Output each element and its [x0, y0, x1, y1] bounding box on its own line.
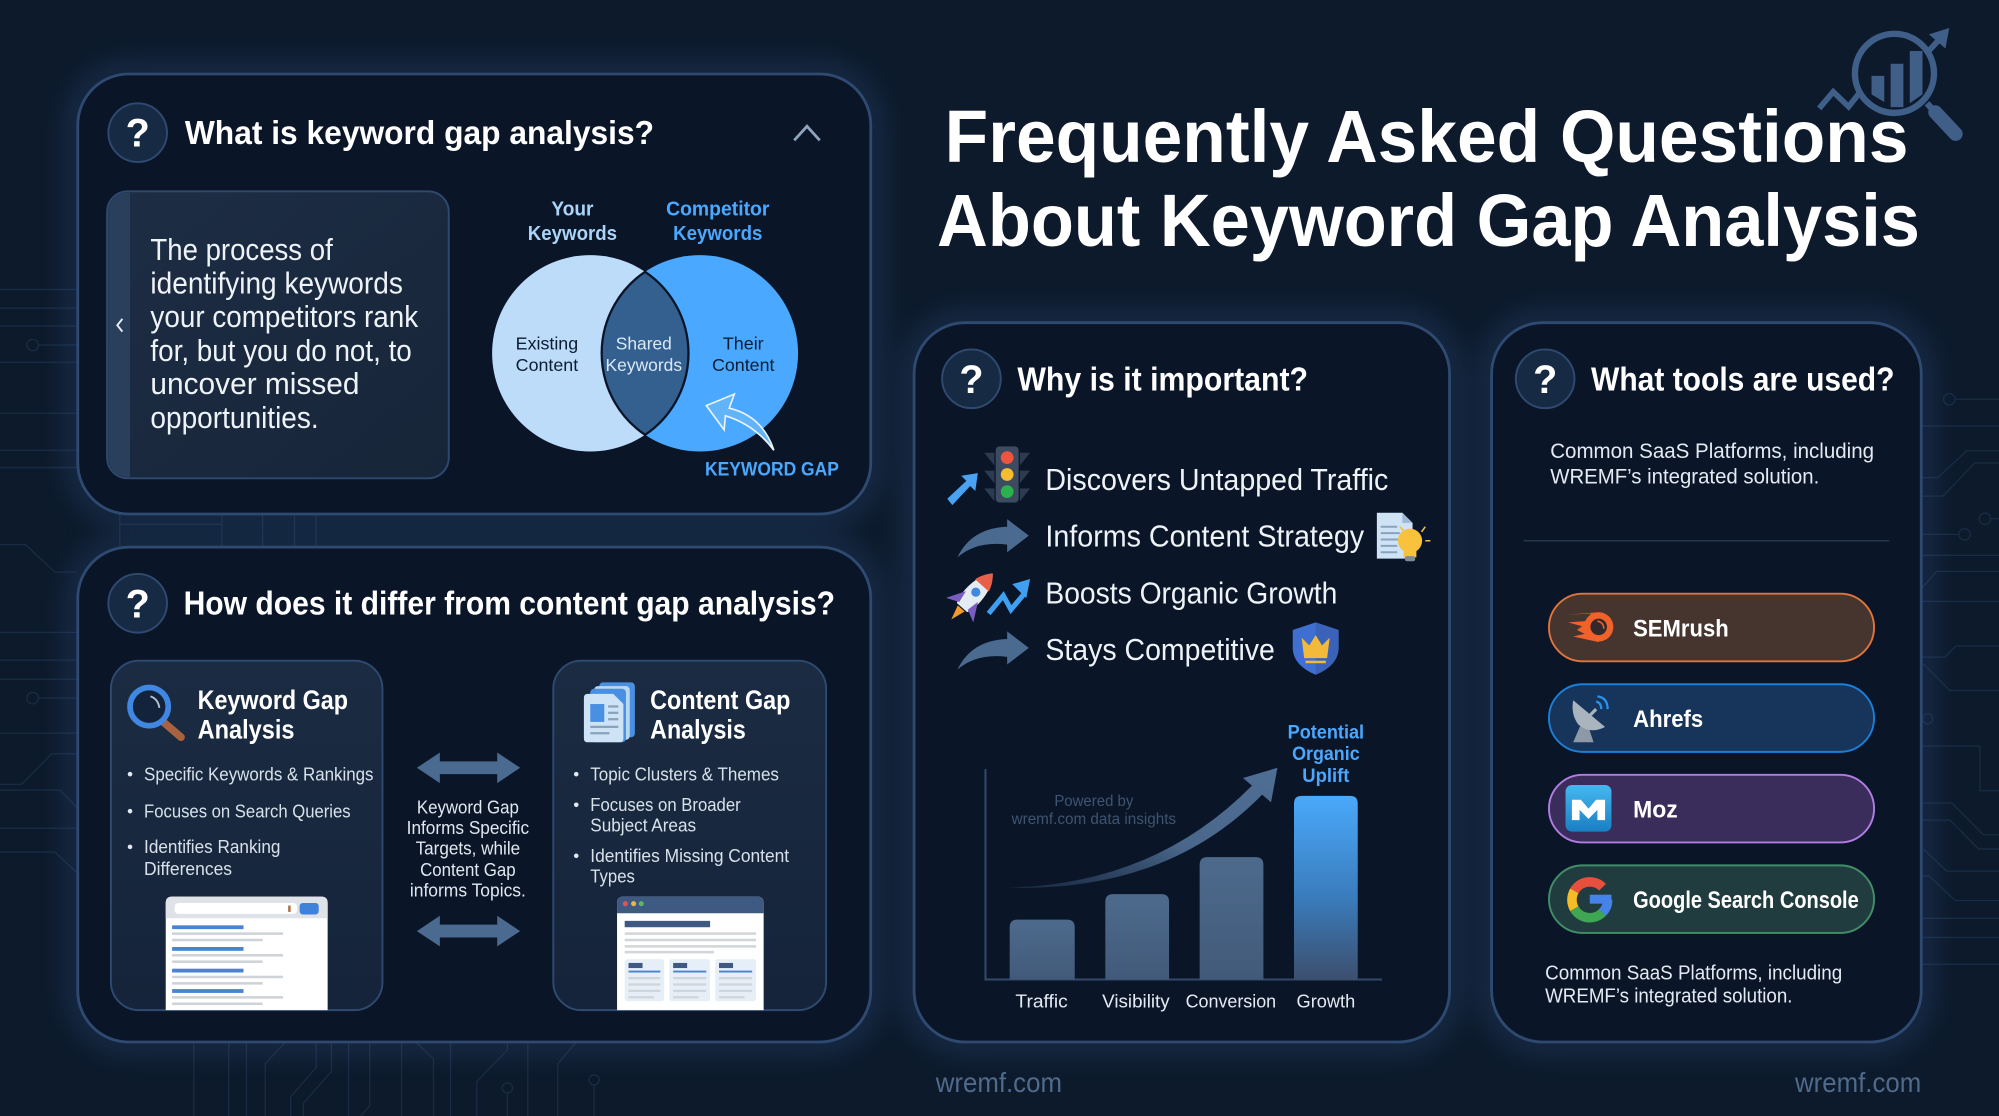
bullet list: Types — [590, 866, 635, 887]
card title: Analysis — [650, 714, 746, 744]
icon: question badge: ? — [126, 582, 150, 626]
venn diagram: Content — [712, 355, 775, 375]
icon: question badge — [942, 349, 1001, 408]
bullet list — [574, 764, 789, 887]
tool: ahrefs: Ahrefs — [1633, 706, 1703, 733]
bullet list: Focuses on Search Queries — [144, 801, 351, 822]
card title — [650, 685, 790, 744]
tool: semrush — [1549, 594, 1874, 661]
intro text: WREMF’s integrated solution. — [1550, 463, 1819, 488]
relationship note — [407, 797, 529, 901]
icon: traffic light — [984, 446, 1030, 503]
callout: potential organic uplift: Organic — [1292, 744, 1360, 765]
arrow: curved right — [957, 519, 1029, 557]
callout: potential organic uplift — [1288, 722, 1364, 787]
icon: shield with crown — [1293, 622, 1339, 675]
closing text: Common SaaS Platforms, including — [1545, 963, 1842, 985]
closing text — [1545, 963, 1842, 1007]
icon: question badge — [108, 103, 167, 162]
definition card — [107, 191, 449, 478]
venn: your keywords label: Your — [551, 199, 594, 221]
panel: what tools are used — [1492, 323, 1921, 1042]
relationship note: informs Topics. — [410, 880, 526, 901]
bar: growth — [1294, 796, 1358, 980]
icon: google g — [1572, 882, 1611, 918]
panel: keyword vs content gap — [78, 547, 871, 1042]
venn diagram: Existing — [516, 333, 578, 353]
callout: potential organic uplift: Potential — [1288, 722, 1364, 743]
axis labels — [1015, 991, 1355, 1012]
arrow: keyword gap pointer — [706, 394, 774, 450]
venn: competitor keywords label: Competitor — [666, 199, 769, 221]
tool: moz — [1549, 775, 1874, 842]
bullet list: Subject Areas — [590, 815, 696, 836]
axis labels: Visibility — [1102, 991, 1170, 1012]
tool: moz: Moz — [1633, 797, 1678, 824]
venn diagram: Keywords — [606, 355, 682, 375]
icon: question badge: ? — [959, 358, 984, 402]
title: Frequently Asked Questions — [945, 95, 1908, 178]
axis labels: Conversion — [1186, 991, 1276, 1012]
arrow: upward trend — [1006, 768, 1277, 888]
arrow: bidirectional upper — [417, 753, 520, 783]
definition card: your competitors rank — [150, 300, 419, 334]
heading: What tools are used? — [1591, 361, 1894, 398]
bullet list: Differences — [144, 858, 232, 879]
definition card: opportunities. — [150, 401, 319, 435]
icon: magnifier — [130, 687, 181, 737]
chart watermark note: Powered by — [1054, 793, 1134, 810]
venn diagram: Content — [516, 355, 578, 375]
keyword gap label: KEYWORD GAP — [705, 459, 839, 481]
card title: Content Gap — [650, 685, 790, 715]
chart watermark note — [1011, 793, 1176, 828]
tool: google search console — [1549, 865, 1874, 933]
row text: informs content strategy: Informs Content Strategy — [1045, 520, 1365, 554]
venn: competitor keywords label — [666, 199, 769, 245]
venn: your keywords label — [528, 199, 617, 245]
bullet list: Identifies Ranking — [144, 836, 280, 857]
bullet list: Identifies Missing Content — [590, 845, 789, 866]
bar chart — [985, 722, 1382, 1012]
axis labels: Growth — [1297, 991, 1355, 1012]
venn diagram: Their — [723, 333, 764, 353]
callout: potential organic uplift: Uplift — [1302, 766, 1350, 787]
card title: Analysis — [198, 714, 294, 744]
card: keyword gap analysis — [111, 661, 382, 1010]
definition card: for, but you do not, to — [150, 334, 412, 368]
venn diagram — [492, 199, 839, 481]
bullet list: Specific Keywords & Rankings — [144, 764, 374, 785]
venn diagram: Shared — [616, 333, 672, 353]
article page mockup — [617, 897, 764, 1010]
heading: How does it differ from content gap analysis? — [184, 586, 835, 623]
venn: your keywords label: Keywords — [528, 223, 617, 245]
row text: stays competitive: Stays Competitive — [1045, 633, 1275, 667]
tool: ahrefs — [1549, 684, 1874, 752]
arrow: curved right — [957, 631, 1029, 670]
bullet list — [128, 764, 374, 879]
axis labels: Traffic — [1015, 991, 1068, 1012]
intro text: Common SaaS Platforms, including — [1550, 438, 1874, 463]
bullet list: Focuses on Broader — [590, 794, 741, 815]
icon: question badge — [1516, 349, 1574, 408]
relationship note: Informs Specific — [407, 817, 529, 838]
icon: question badge: ? — [126, 112, 150, 156]
icon: document stack — [584, 682, 635, 742]
chart watermark note: wremf.com data insights — [1011, 811, 1176, 828]
definition card: The process of — [150, 233, 333, 267]
arrow: bidirectional lower — [417, 916, 520, 946]
icon: magnifier with rising bar chart — [1819, 28, 1956, 134]
card: content gap analysis — [553, 661, 826, 1010]
search results mockup — [166, 897, 328, 1010]
panel: why is it important — [914, 323, 1450, 1042]
icon: moz logo — [1566, 785, 1611, 832]
icon: document with light bulb — [1377, 513, 1430, 561]
heading: What is keyword gap analysis? — [185, 115, 654, 152]
icon: semrush flame — [1567, 612, 1613, 642]
relationship note: Targets, while — [416, 838, 520, 859]
intro text — [1550, 438, 1874, 488]
relationship note: Keyword Gap — [417, 797, 519, 818]
icon: question badge — [108, 574, 167, 633]
tool: google search console: Google Search Console — [1633, 887, 1859, 914]
icon: satellite dish — [1573, 696, 1608, 742]
bar: traffic — [1010, 920, 1075, 980]
icon: growth arrow — [989, 579, 1030, 613]
icon: arrow up right — [947, 473, 978, 505]
card title — [198, 685, 348, 744]
venn: competitor keywords label: Keywords — [673, 223, 762, 245]
bullet list: Topic Clusters & Themes — [590, 764, 779, 785]
footer: brand right: wremf.com — [1794, 1067, 1921, 1098]
title — [937, 95, 1920, 262]
footer: brand left: wremf.com — [935, 1067, 1062, 1098]
icon: rocket — [938, 561, 1006, 632]
row text: boosts organic growth: Boosts Organic Growth — [1045, 576, 1337, 610]
icon: question badge: ? — [1533, 358, 1557, 402]
title: About Keyword Gap Analysis — [937, 179, 1920, 262]
row text: discovers untapped traffic: Discovers Untapped Traffic — [1045, 463, 1388, 497]
icon: collapse chevron — [794, 126, 820, 140]
closing text: WREMF’s integrated solution. — [1545, 985, 1792, 1007]
tool: semrush: SEMrush — [1633, 615, 1729, 642]
panel: what is keyword gap analysis — [78, 74, 871, 514]
bar: conversion — [1200, 857, 1263, 980]
card title: Keyword Gap — [198, 685, 348, 715]
definition card: identifying keywords — [150, 266, 403, 300]
relationship note: Content Gap — [420, 859, 516, 880]
bar: visibility — [1105, 894, 1169, 980]
definition card: uncover missed — [150, 367, 360, 401]
heading: Why is it important? — [1017, 361, 1308, 398]
